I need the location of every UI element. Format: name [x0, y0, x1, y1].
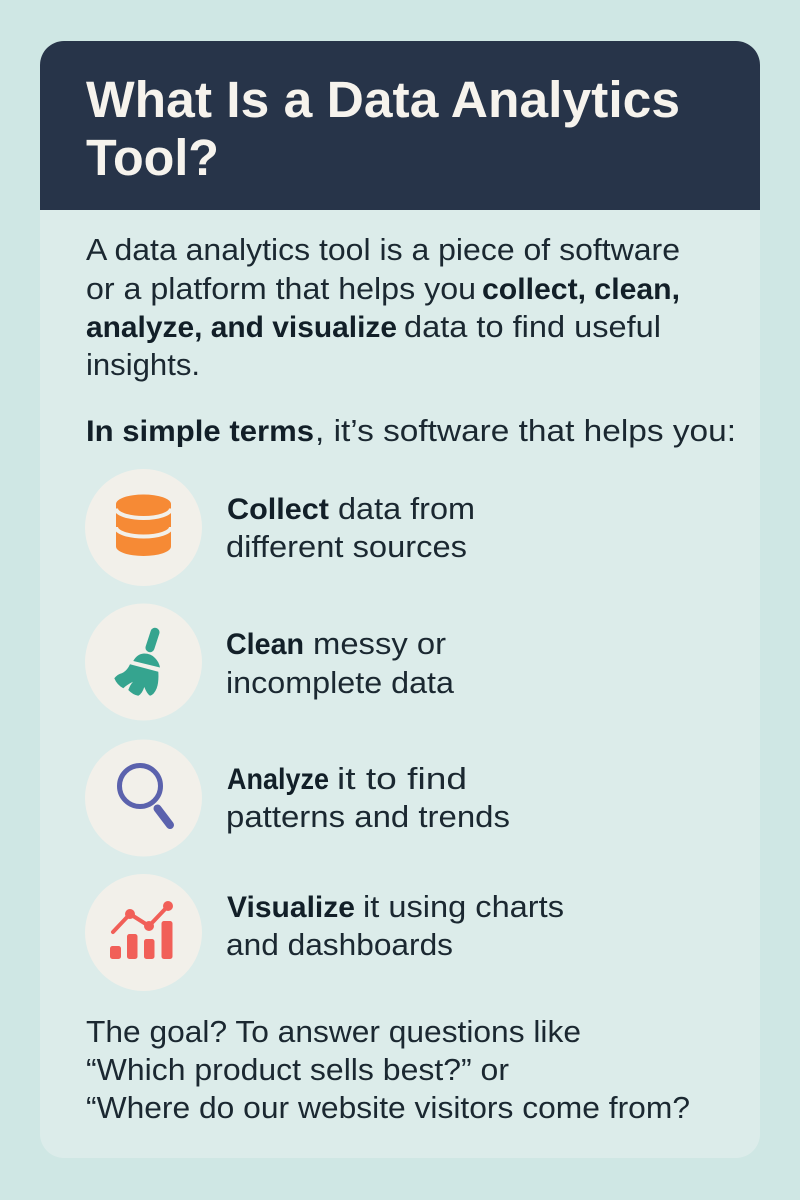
text block: the goal: The goal? To answer questions like	[86, 1015, 581, 1049]
label: clean: Clean	[226, 628, 304, 661]
icon: broom	[85, 604, 202, 720]
label: analyze: Analyze	[227, 763, 329, 796]
text block: definition: or a platform that helps you	[86, 272, 476, 306]
title: What Is a Data Analytics	[86, 71, 680, 128]
text block: definition: insights.	[86, 348, 200, 382]
icon: chart	[85, 874, 202, 991]
label: visualize: and dashboards	[226, 928, 453, 962]
list item: analyze	[85, 740, 510, 856]
list item: clean	[85, 604, 454, 720]
label: analyze	[226, 762, 510, 834]
text block: the goal	[86, 1015, 690, 1125]
label: visualize	[226, 890, 564, 962]
text block: definition: collect, clean,	[482, 273, 680, 306]
label: visualize: it using charts	[363, 890, 564, 924]
list item: visualize	[85, 874, 564, 991]
label: collect: different sources	[226, 530, 467, 564]
text block: definition: analyze, and visualize	[86, 311, 397, 344]
panel: header band	[40, 41, 760, 210]
text block: lead-in: In simple terms	[86, 415, 314, 448]
label: clean: messy or	[313, 627, 446, 661]
text block: lead-in	[86, 414, 736, 448]
label: analyze: it to find	[337, 762, 467, 796]
text block: the goal: “Where do our website visitors come from?	[86, 1091, 690, 1125]
list item: collect	[85, 469, 475, 586]
title: Tool?	[86, 129, 219, 186]
text block: the goal: “Which product sells best?” or	[86, 1053, 509, 1087]
label: clean: incomplete data	[226, 666, 454, 700]
text block: definition	[86, 233, 680, 382]
title	[86, 71, 680, 186]
label: collect: data from	[338, 492, 475, 526]
label: collect	[226, 492, 475, 564]
label: clean	[226, 627, 454, 700]
label: visualize: Visualize	[227, 891, 355, 924]
text block: definition: A data analytics tool is a piece of software	[86, 233, 680, 267]
icon: magnifying glass	[85, 740, 202, 856]
text block: definition: data to find useful	[404, 310, 661, 344]
icon: database	[85, 469, 202, 586]
label: collect: Collect	[227, 493, 329, 526]
label: analyze: patterns and trends	[226, 800, 510, 834]
text block: lead-in: , it’s software that helps you:	[315, 414, 736, 448]
